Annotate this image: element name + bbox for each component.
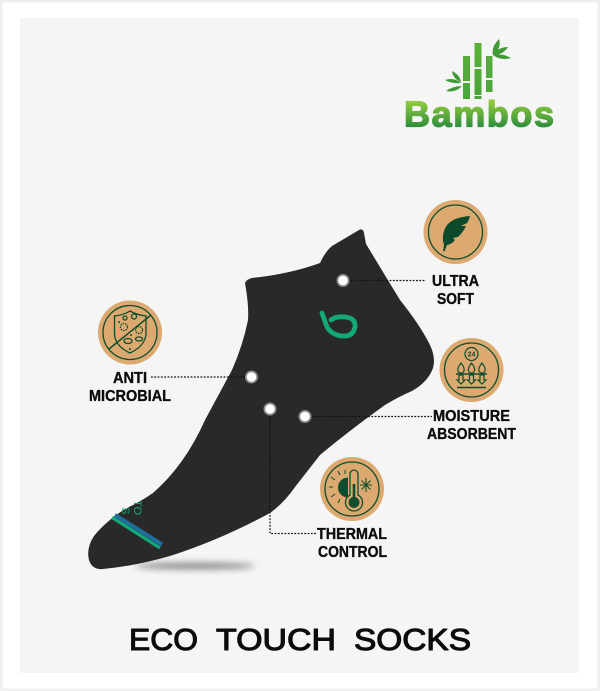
label [89, 370, 171, 405]
callout: anti microbial [89, 300, 258, 405]
title: TOUCH [216, 622, 336, 657]
label: THERMAL [317, 526, 387, 543]
label [427, 408, 516, 443]
icon: moisture: 24 [468, 352, 475, 358]
label: ABSORBENT [427, 426, 516, 443]
label: CONTROL [318, 544, 387, 561]
connector line [350, 280, 426, 282]
icon: thermometer [320, 457, 384, 521]
icon: bamboo stalks [445, 39, 511, 99]
label: ULTRA [432, 273, 479, 290]
connector line [270, 416, 316, 534]
marker [264, 402, 276, 416]
icon: moisture [440, 338, 504, 402]
label: SOFT [437, 291, 474, 308]
toe text: TO [131, 500, 143, 516]
logo wordmark: Bambos [404, 94, 554, 134]
logo: Bambos [404, 39, 554, 134]
sock shadow [135, 562, 255, 570]
callout: moisture absorbent [298, 338, 516, 443]
toe stripes [112, 515, 162, 548]
title: ECO [129, 622, 198, 657]
connector line [151, 376, 245, 378]
marker [336, 274, 350, 287]
sock logo: b [322, 313, 355, 336]
callout: ultra soft [336, 200, 488, 308]
label: ANTI [113, 370, 147, 387]
toe text: S [119, 507, 131, 514]
connector line [312, 416, 432, 418]
label [317, 526, 387, 561]
label [432, 273, 479, 308]
icon: shield [98, 300, 162, 364]
toe text [119, 500, 143, 516]
sock [88, 229, 434, 569]
label: MICROBIAL [89, 388, 171, 405]
label: MOISTURE [433, 408, 510, 425]
callout: thermal control [264, 402, 387, 561]
title: SOCKS [354, 622, 471, 657]
title [129, 622, 471, 657]
marker [245, 370, 258, 384]
marker [298, 410, 312, 423]
icon: feather [424, 200, 488, 264]
